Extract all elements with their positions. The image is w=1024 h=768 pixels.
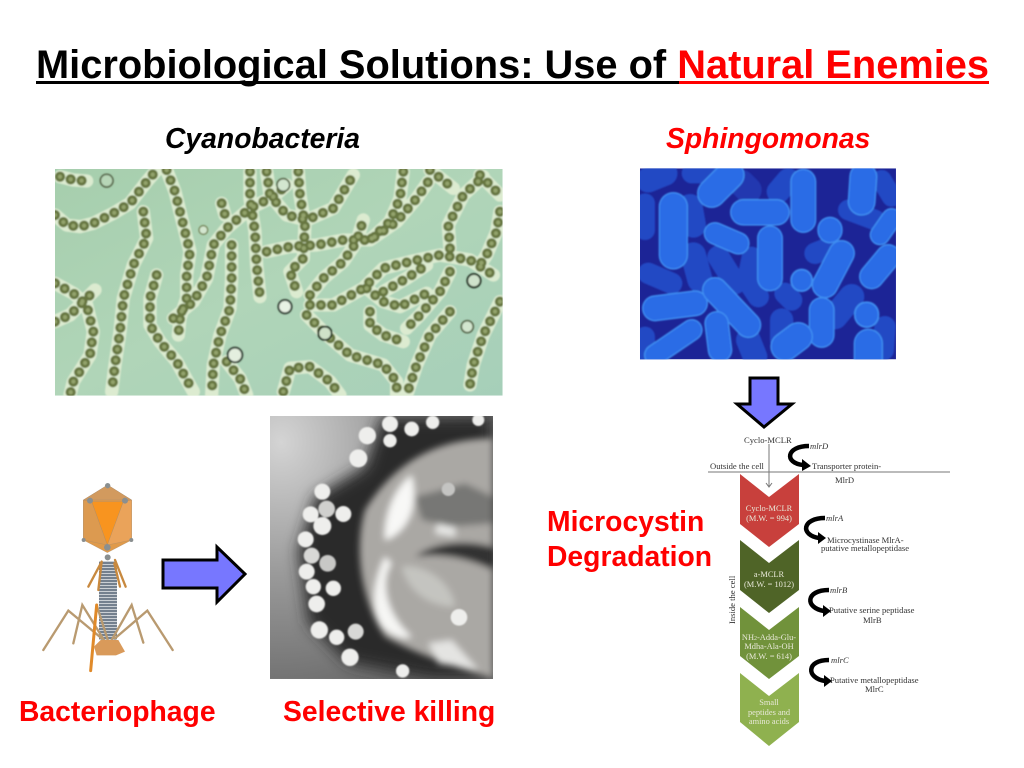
title: Microbiological Solutions: Use of Natural Enemies [36, 43, 989, 87]
pathway labels: MlrD [835, 475, 854, 485]
dark halo around cell [298, 416, 493, 679]
pathway labels: Putative serine peptidase [829, 605, 915, 615]
chevron: NH2-Adda-Glu: Mdha-Ala-OH [744, 642, 794, 651]
image: phages attacking cell [270, 414, 493, 679]
pathway labels: mlrD [810, 441, 829, 451]
chevron: NH2-Adda-Glu [740, 607, 799, 679]
phage tail [81, 562, 135, 640]
chevron: a-MCLR: (M.W. = 1012) [744, 580, 794, 589]
chevron: Cyclo-MCLR [740, 474, 799, 547]
rods front layer [655, 175, 892, 363]
chevron: Cyclo-MCLR: (M.W. = 994) [746, 514, 792, 523]
phage collar and legs [43, 560, 173, 671]
entry arrow [766, 444, 772, 487]
chevron: Cyclo-MCLR: Cyclo-MCLR [746, 504, 793, 513]
chevron: a-MCLR: a-MCLR [754, 570, 785, 579]
chevron: small peptides: Small [759, 698, 779, 707]
pathway labels: Putative metallopeptidase [830, 675, 919, 685]
pathway labels [710, 435, 919, 694]
phage vertices [82, 483, 133, 560]
chevron: a-MCLR [740, 540, 799, 613]
diagram: microcystin degradation pathway [708, 435, 950, 746]
pathway labels: mlrB [830, 585, 848, 595]
pathway labels: Cyclo-MCLR [744, 435, 792, 445]
cell membrane line [708, 471, 950, 473]
phage head [83, 485, 132, 553]
pathway labels: MlrC [865, 684, 884, 694]
pathway labels: mlrA [826, 513, 844, 523]
pathway labels: MlrB [863, 615, 882, 625]
label: Microcystin Degradation [547, 505, 712, 572]
chevron: small peptides [740, 673, 799, 746]
heading: Sphingomonas: Sphingomonas [666, 122, 870, 154]
chevron: NH2-Adda-Glu: (M.W. = 614) [746, 652, 792, 661]
chevron: NH2-Adda-Glu: NH2-Adda-Glu- [742, 633, 796, 642]
image: bacteriophage [43, 483, 173, 671]
label: Microcystin Degradation: Microcystin [547, 505, 704, 537]
image: sphingomonas rods [640, 168, 896, 363]
phage base plate [94, 640, 125, 655]
image: cyanobacteria chains [55, 169, 503, 396]
pathway labels: Microcystinase MlrA- [827, 535, 904, 545]
chevron: small peptides: amino acids [749, 717, 789, 726]
chevron: small peptides: peptides and [748, 708, 791, 717]
pathway labels: putative metallopeptidase [821, 543, 909, 553]
heading: Cyanobacteria: Cyanobacteria [165, 122, 360, 154]
label: Microcystin Degradation: Degradation [547, 540, 712, 572]
pathway labels: Inside the cell [727, 575, 737, 624]
arrow: down [737, 378, 792, 427]
label: Bacteriophage: Bacteriophage [19, 695, 216, 727]
curved black arrows [790, 446, 829, 681]
pathway labels: Outside the cell [710, 461, 765, 471]
label: Selective killing: Selective killing [283, 695, 495, 727]
pathway labels: Transporter protein- [812, 461, 881, 471]
arrow: right [163, 547, 245, 602]
phage particles [298, 414, 484, 678]
bacterial cell [360, 438, 493, 678]
pathway labels: mlrC [831, 655, 849, 665]
